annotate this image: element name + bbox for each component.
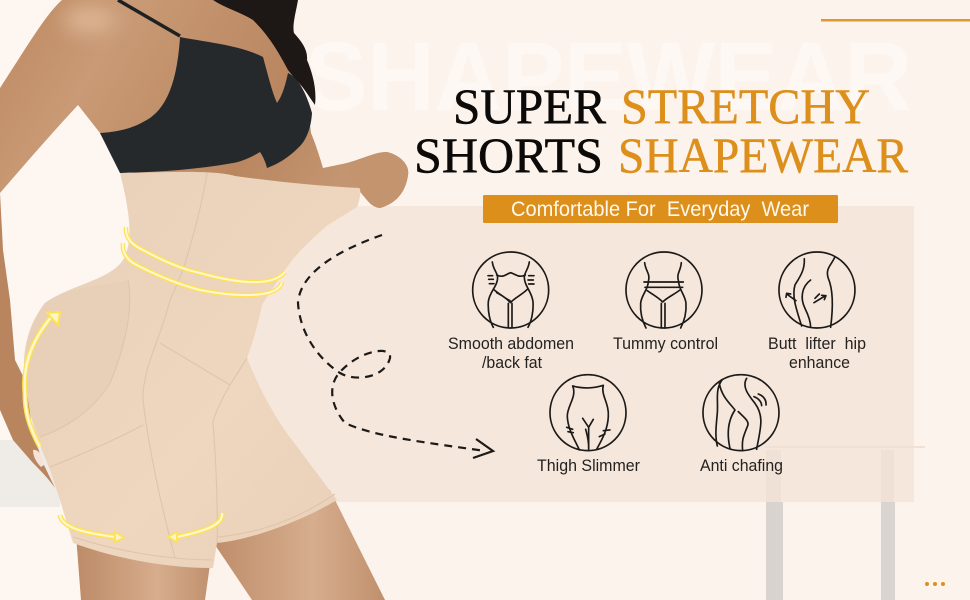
left lower leg xyxy=(76,535,212,600)
seam lines xyxy=(40,173,335,560)
label: tummy control: Tummy control xyxy=(613,335,718,353)
ghost word: SHAPEWEAR: SHAPEWEAR xyxy=(305,22,912,131)
label: smooth abdomen: Smooth abdomen xyxy=(448,335,574,353)
label: butt lifter xyxy=(768,335,866,372)
table behind panel xyxy=(765,446,925,502)
fingernail xyxy=(33,450,44,467)
title: SHORTS xyxy=(414,127,603,183)
shoulder highlight xyxy=(64,6,116,34)
icon: butt lifter xyxy=(779,252,855,328)
arrow: right thigh xyxy=(168,513,222,542)
arrow: hip lift xyxy=(25,312,60,447)
dashed arrow xyxy=(298,235,493,458)
label: anti chafing: Anti chafing xyxy=(700,457,783,475)
hip pad shading xyxy=(25,280,130,437)
torso and raised arm xyxy=(0,0,408,208)
bra strap xyxy=(118,0,180,36)
title: STRETCHY xyxy=(621,78,870,134)
hair xyxy=(213,0,315,105)
label: smooth abdomen: /back fat xyxy=(482,354,542,372)
title: SHAPEWEAR xyxy=(618,127,909,183)
arrow: left thigh xyxy=(60,515,124,542)
icon: thigh slimmer xyxy=(550,375,626,451)
decorative top line xyxy=(821,19,970,22)
yellow waist rings xyxy=(123,227,285,295)
label: butt lifter: Butt lifter hip xyxy=(768,335,866,353)
lifted waistband hand xyxy=(347,152,408,208)
left lowered arm and hand xyxy=(0,193,55,488)
icon: smooth abdomen xyxy=(473,252,549,328)
bra xyxy=(100,37,312,173)
icon: anti chafing xyxy=(703,375,779,451)
icon: tummy control xyxy=(626,252,702,328)
title: SUPER xyxy=(453,78,607,134)
pagination dots xyxy=(925,582,945,586)
high-waist stretch top and shorts xyxy=(24,172,360,568)
panel: benefits xyxy=(140,206,914,502)
title xyxy=(414,78,909,183)
subtitle banner: Comfortable For Everyday Wear xyxy=(511,198,809,221)
label: smooth abdomen xyxy=(448,335,574,372)
model photo illustration xyxy=(0,0,408,600)
label: butt lifter: enhance xyxy=(789,354,850,372)
right lower leg xyxy=(205,490,385,600)
label: thigh slimmer: Thigh Slimmer xyxy=(537,457,640,475)
